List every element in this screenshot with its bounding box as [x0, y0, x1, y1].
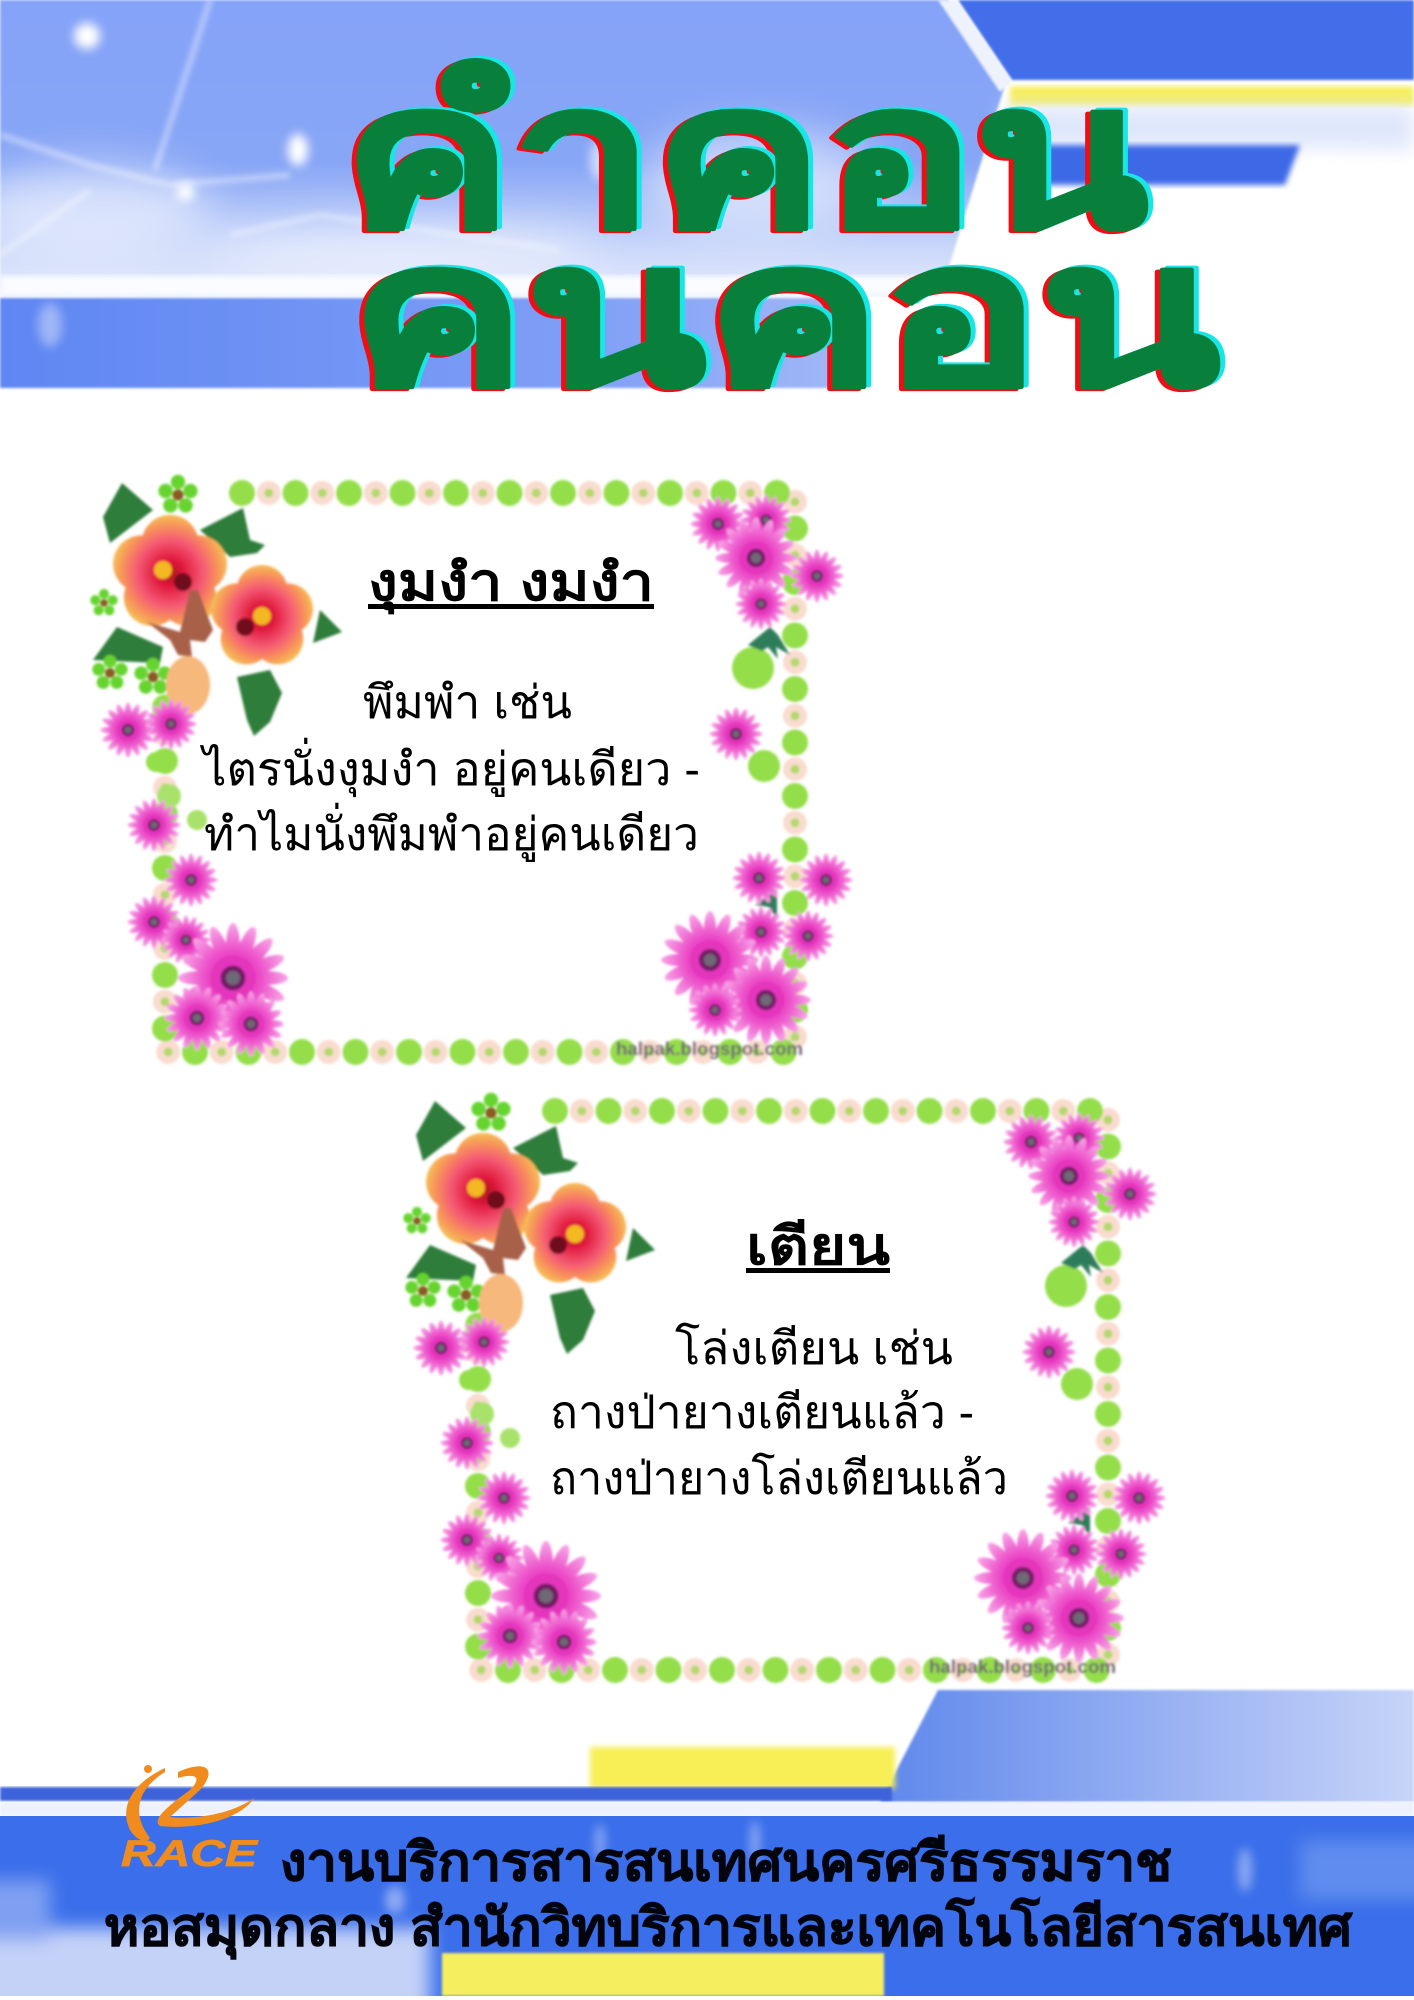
- definition text 2: ถางป่ายางโล่งเตียนแล้ว: [550, 1452, 1008, 1504]
- background mottling: [0, 0, 560, 255]
- definition text 1: ไตรนั่งงุมงำ อยู่คนเดียว -: [199, 737, 700, 798]
- footer text: หอสมุดกลาง สำนักวิทบริการและเทคโนโลยีสารสนเทศ: [104, 1896, 1353, 1960]
- title line 1: คำคอน: [343, 46, 1148, 269]
- heading: ngum ngam: งุมงำ งมงำ: [368, 554, 654, 615]
- panel: flower frame 1: [90, 475, 853, 1059]
- title line 1: คำคอน: [348, 44, 1153, 267]
- definition text 2: ถางป่ายางเตียนแล้ว -: [550, 1386, 974, 1438]
- title line 2: คนคอน: [350, 204, 1220, 427]
- flower border 2: [403, 1093, 1166, 1677]
- title line 2: คนคอน: [345, 206, 1215, 429]
- panel: flower frame 2: [403, 1093, 1166, 1677]
- flower border 1: [90, 475, 853, 1059]
- title line 2: คนคอน: [355, 202, 1225, 425]
- logo: RACE: [121, 1765, 259, 1874]
- title line 1: คำคอน: [338, 48, 1143, 271]
- title: [338, 44, 1225, 429]
- definition text 2: [550, 1322, 1008, 1504]
- definition text 2: โล่งเตียน เช่น: [675, 1322, 953, 1374]
- heading: tian: เตียน: [746, 1218, 891, 1276]
- definition text 1: พึมพำ เช่น: [363, 676, 572, 728]
- background: top banner: [0, 0, 1414, 388]
- logo: RACE: RACE: [121, 1833, 259, 1874]
- footer text: [104, 1834, 1353, 1960]
- definition text 1: [199, 676, 700, 862]
- definition text 1: ทำไมนั่งพึมพำอยู่คนเดียว: [204, 802, 699, 862]
- footer text: งานบริการสารสนเทศนครศรีธรรมราช: [280, 1834, 1172, 1892]
- background: footer band: [0, 1690, 1414, 2000]
